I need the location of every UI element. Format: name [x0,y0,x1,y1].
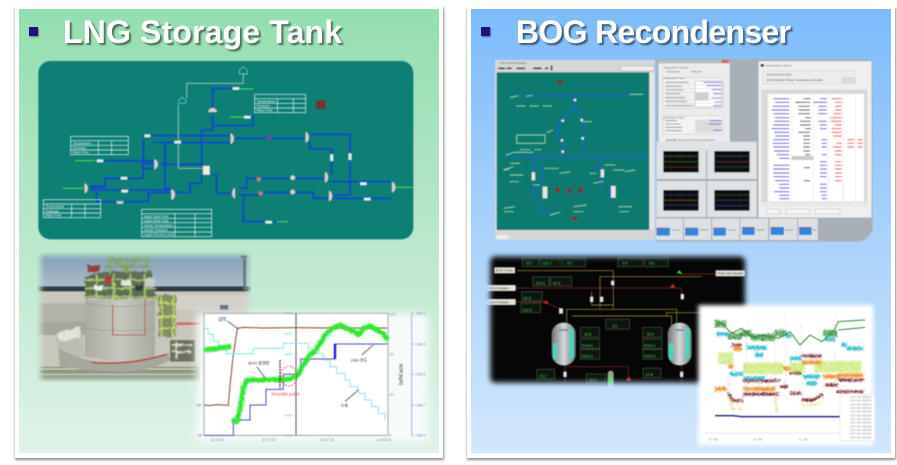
window: spreadsheet [758,61,872,218]
axis ticks: -4480 [283,413,293,417]
control screen: BOG recondenser HMI: 102.3 [523,308,532,312]
window: integration control: Historical [703,138,715,142]
legend: Ctrl T de.TR2219 [850,424,872,428]
control screen: BOG recondenser HMI: 0.0 [622,262,627,266]
callout leaders [227,321,373,402]
panel: BOG Recondenser [467,6,896,460]
legend: Ctrl T de.TR2214 [850,406,872,410]
control screen: BOG recondenser HMI [483,250,750,389]
control screen: BOG recondenser HMI: 23.7 [526,262,533,266]
control screen: BOG recondenser HMI: 112.3 [536,281,545,285]
small monitor charts [657,142,757,217]
control screen: BOG recondenser HMI: 4021.2 [582,355,593,359]
data table: stream bottom left: Pressure [45,209,59,213]
legend: Ctrl T de.TR2220 [850,428,872,432]
series: green top [715,324,837,337]
axis labels [709,437,809,442]
data table: stream top right [255,94,306,113]
axis ticks [197,312,425,442]
heading: BOG Recondenser: BOG Recondenser [516,14,791,50]
axis labels: 0 :00 [753,437,763,442]
window: spreadsheet: Selected Flow BG1 [767,73,793,77]
process flow diagram: LNG storage tank [38,61,413,239]
bullet: left heading [29,27,39,37]
control screen: BOG recondenser HMI: 75.7 [539,374,546,378]
chart annotations: Knuckle point [271,391,300,396]
tank top platform [57,252,192,358]
series: LNG temperature [204,344,387,435]
window: spreadsheet: E/O1 Variable Phase Temperature [F/s/all] [767,78,822,82]
trend chart: multi-variable scatter [698,305,875,445]
window: integration control: Integration Control [663,65,688,69]
control screen: BOG recondenser HMI: 17.6 [646,373,653,377]
chart annotations: 수위 [341,402,348,408]
legend: Ctrl T de.TR2222 [850,435,872,439]
legend [840,394,875,441]
legend: Ctrl T de.TR2213 [850,402,872,406]
window: integration control: General [666,138,677,142]
legend: Ctrl T de.TR2215 [850,410,872,414]
window: process flowsheet [495,60,655,240]
chart annotations: BOR [kg/h] [398,364,403,385]
controller faceplates [656,218,818,240]
control screen: BOG recondenser HMI: 0.0 [612,325,617,329]
window: spreadsheet: Spreadsheet Watch [765,64,792,68]
legend: Ctrl T de.TR2221 [850,432,872,436]
series: yellow-green [718,358,862,368]
axis ticks: -4400 [283,312,293,316]
series: green upper lines [715,320,865,345]
control screen: BOG recondenser HMI: 62.3 [524,296,531,300]
axis ticks: -160.9 [415,434,425,438]
vessels [552,323,692,389]
line labels: Control Header [486,300,510,304]
axis ticks: -4420 [283,332,293,336]
heading: LNG Storage Tank: LNG Storage Tank [65,16,344,52]
data table: stream left middle: Pressure [73,146,86,150]
data table: tank [142,209,212,237]
control screen: BOG recondenser HMI: 142.7 [542,262,551,266]
data table: stream top right: Mass Flow [257,109,273,113]
axis ticks: -4500 [283,434,293,438]
series: cyan [717,334,863,383]
data table: stream left middle [71,136,128,155]
window: process flowsheet: Flow Sheet Window [500,61,527,65]
heading: BOG Recondenser: BOG Recondenser [518,16,793,52]
control screen: BOG recondenser HMI: 4100.2 [644,355,655,359]
panel: LNG Storage Tank [15,6,444,460]
control screen: BOG recondenser HMI: 42.0 [647,332,654,336]
readout boxes [521,258,668,383]
series: pressure [204,327,387,406]
axis labels: 0 :00 [709,437,719,442]
line chart: pressure, BOG flow, LNG temperature [197,312,428,442]
axis ticks: 14:32:10 [377,438,391,442]
simulator screenshot [495,59,873,242]
series: temperature steps [204,328,385,420]
control screen: BOG recondenser HMI: 0.0 [567,262,572,266]
series: navy baseline [715,416,840,417]
line labels: Control Header [486,286,510,290]
axis ticks: 80 [389,352,393,356]
axis ticks: 10 [198,433,202,437]
control screen: BOG recondenser HMI: 0.0 [649,262,654,266]
data table: tank: Liquid Percent Level [144,233,174,237]
line labels [485,267,745,305]
control screen: BOG recondenser HMI: 42.0 [584,332,591,336]
line labels: Fluid Gas Header [717,272,744,276]
window: integration control: Manual [692,70,702,74]
window: integration control: Automatic [667,70,680,74]
axis ticks: -160.5 [415,373,425,377]
legend: Ctrl T de.TR2211 [850,395,872,399]
control screen: BOG recondenser HMI: 92.3 [553,281,560,285]
axis ticks: 10 [197,403,201,407]
chart annotations: 압력 [218,316,226,323]
control screen: BOG recondenser HMI: 3744.1 [644,344,655,348]
data table: tank: Liquid Mole Flow [144,219,169,223]
legend: Ctrl T de.TR2217 [850,417,872,421]
axis ticks: 11:17:10 [262,438,276,442]
data table: stream bottom left [43,200,101,218]
chart annotations [218,316,403,408]
data table: tank: Vessel Pressure [144,228,168,232]
data table: stream left middle: Mass Flow [73,151,89,155]
control screen: BOG recondenser HMI: 3744.1 [582,344,593,348]
data table: stream bottom left: Mass Flow [45,214,62,218]
axis ticks: 11:27:10 [320,438,334,442]
axis ticks: 11:12:10 [210,438,224,442]
window: integration control: Options [692,138,702,142]
photo: LNG storage tank facility [37,252,252,382]
heading: LNG Storage Tank: LNG Storage Tank [63,14,342,50]
data table: stream left middle: Temperature [73,141,91,145]
data table: tank: Vapor Mole Flow [144,214,169,218]
legend: Ctrl T de.TR2212 [850,399,872,403]
axis ticks: 40 [389,393,393,397]
control screen: BOG recondenser HMI: 33.0 [589,378,596,382]
data table: tank: Vessel Temperature [144,223,173,227]
line labels: BOG Comp [496,269,513,273]
window: integration control [658,60,730,150]
chart annotations: LNG 온도 [351,357,368,362]
chart annotations: BOG 발생량 [248,359,270,365]
axis ticks: -4440 [283,353,293,357]
window: integration control: Integration Step [663,115,685,119]
series: orange [715,349,863,389]
spikes [728,313,835,413]
bullet: right heading [481,27,491,37]
axis ticks: -160.3 [415,342,425,346]
axis ticks: -160.1 [415,312,425,316]
window: integration control: Integration Time [663,76,685,80]
equipment symbols [84,108,396,202]
window: integration control: Execution [678,138,691,142]
axis ticks: 0 [389,433,391,437]
axis ticks: -160.7 [415,403,425,407]
series: pale yellow [728,397,823,413]
series: dark red [728,345,863,401]
legend: Ctrl T de.TR2218 [850,421,872,425]
axis labels: 0 :10 [799,437,809,442]
valves [543,270,684,381]
data table: stream bottom left: Temperature [45,205,64,209]
data table: stream top right: Temperature [257,99,275,103]
series: BOG flow [204,325,387,422]
axis ticks: 120 [389,312,395,316]
data table: stream top right: Pressure [257,104,270,108]
legend: Ctrl T de.TR2216 [850,413,872,417]
knuckle point marker [281,366,297,386]
